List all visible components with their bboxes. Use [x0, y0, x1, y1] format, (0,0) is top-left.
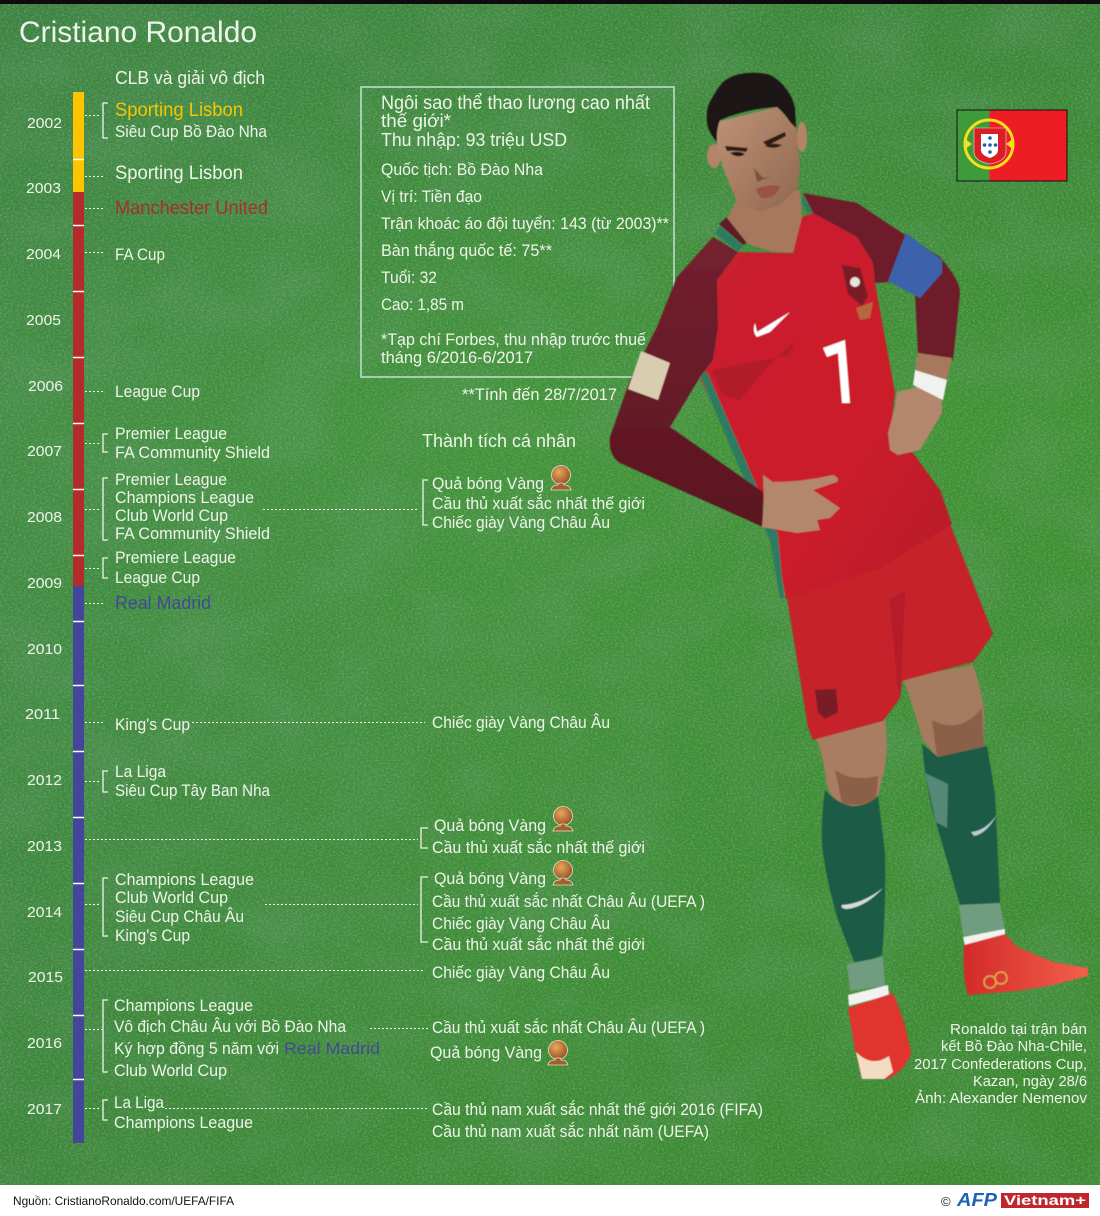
hand on hip	[762, 475, 840, 533]
face	[717, 107, 800, 212]
panel: player facts: thế giới*	[381, 111, 451, 131]
clubs and trophies by year: King's Cup	[115, 927, 190, 945]
panel: player facts: Trận khoác áo đội tuyển: 143 (từ 2003)**	[381, 215, 670, 233]
footnote: **Tính đến 28/7/2017	[462, 386, 617, 404]
individual honours list: Cầu thủ nam xuất sắc nhất thế giới 2016 (FIFA)	[432, 1100, 763, 1119]
clubs and trophies by year: League Cup	[115, 569, 200, 587]
clubs and trophies by year: Club World Cup	[115, 507, 228, 525]
swoosh	[754, 312, 790, 337]
captain armband	[888, 233, 942, 298]
year labels: 2005	[26, 312, 61, 329]
clubs and trophies by year: FA Community Shield	[115, 444, 270, 462]
crest	[842, 265, 873, 320]
year labels: 2011	[25, 706, 60, 723]
icon: golden ball 2014	[553, 860, 573, 885]
individual honours list: Cầu thủ xuất sắc nhất thế giới	[432, 935, 645, 954]
collar	[715, 196, 812, 252]
panel: player facts: Vị trí: Tiền đạo	[381, 188, 482, 206]
year labels: 2013	[27, 838, 62, 855]
year labels: 2007	[27, 443, 62, 460]
clubs and trophies by year: Champions League	[115, 871, 254, 889]
panel: player facts: Ngôi sao thể thao lương cao nhất	[381, 93, 651, 114]
right sleeve	[803, 193, 960, 360]
clubs and trophies by year: La Liga	[114, 1094, 165, 1112]
year labels: 2010	[27, 641, 62, 658]
clubs and trophies by year: Siêu Cup Châu Âu	[115, 907, 244, 926]
panel: player facts: Tuổi: 32	[381, 269, 437, 287]
photo caption: Ảnh: Alexander Nemenov	[915, 1090, 1088, 1107]
clubs and trophies by year: Champions League	[115, 489, 254, 507]
icon: golden ball 2008	[551, 466, 571, 490]
forearm	[915, 353, 952, 380]
connectors and brackets	[85, 103, 430, 1120]
panel: player facts: Thu nhập: 93 triệu USD	[381, 130, 567, 150]
individual honours list: Cầu thủ xuất sắc nhất Châu Âu (UEFA )	[432, 892, 705, 911]
neck	[727, 190, 802, 252]
left sleeve	[610, 237, 763, 527]
individual honours list: Chiếc giày Vàng Châu Âu	[432, 963, 610, 982]
panel: player facts	[361, 87, 674, 377]
shirt shadow	[712, 340, 795, 400]
photo caption: Kazan, ngày 28/6	[973, 1073, 1087, 1090]
sleeve patch	[628, 351, 670, 400]
photo caption	[914, 1021, 1088, 1107]
number 7	[823, 340, 850, 403]
clubs and trophies by year: Premier League	[115, 471, 227, 489]
jersey torso	[700, 213, 952, 599]
source credit: Nguồn: CristianoRonaldo.com/UEFA/FIFA	[13, 1194, 234, 1208]
panel: player facts: Quốc tịch: Bồ Đào Nha	[381, 161, 544, 179]
Vietnam+ logo: Vietnam+	[1004, 1192, 1086, 1208]
clubs and trophies by year: Real Madrid	[115, 593, 211, 613]
year labels: 2002	[27, 115, 62, 132]
shorts	[787, 524, 993, 740]
timeline bar	[73, 92, 84, 1143]
shorts crest	[815, 689, 838, 719]
panel: player facts: Bàn thắng quốc tế: 75**	[381, 241, 553, 260]
individual honours list: Quả bóng Vàng	[434, 817, 546, 835]
heading: clubs and titles: CLB và giải vô địch	[115, 68, 265, 88]
hair	[707, 73, 796, 142]
ears	[707, 122, 807, 168]
individual honours list: Chiếc giày Vàng Châu Âu	[432, 914, 610, 933]
clubs and trophies by year: Sporting Lisbon	[115, 100, 243, 121]
individual honours list: Cầu thủ nam xuất sắc nhất năm (UEFA)	[432, 1122, 709, 1141]
footer band	[0, 1185, 1100, 1216]
clubs and trophies by year: Real Madrid	[284, 1040, 380, 1058]
individual honours list: Quả bóng Vàng	[432, 475, 544, 493]
year labels	[25, 115, 63, 1118]
photo caption: Ronaldo tại trận bán	[950, 1021, 1087, 1038]
clubs and trophies by year	[114, 100, 380, 1132]
individual honours list: Cầu thủ xuất sắc nhất Châu Âu (UEFA )	[432, 1018, 705, 1037]
individual honours list: Cầu thủ xuất sắc nhất thế giới	[432, 494, 645, 513]
clubs and trophies by year: Champions League	[114, 997, 253, 1015]
panel: player facts: *Tạp chí Forbes, thu nhập trước thuế	[381, 331, 646, 349]
hand at waist	[888, 387, 942, 455]
individual honours list: Chiếc giày Vàng Châu Âu	[432, 513, 610, 532]
year labels: 2015	[28, 969, 63, 986]
year labels: 2004	[26, 246, 61, 263]
year labels: 2012	[27, 772, 62, 789]
copyright and AFP logo: ©	[941, 1194, 951, 1209]
heading: individual honours: Thành tích cá nhân	[422, 431, 576, 451]
year labels: 2017	[27, 1101, 62, 1118]
individual honours list: Cầu thủ xuất sắc nhất thế giới	[432, 838, 645, 857]
clubs and trophies by year: Manchester United	[115, 198, 268, 219]
clubs and trophies by year: Siêu Cup Bồ Đào Nha	[115, 123, 268, 141]
clubs and trophies by year: FA Community Shield	[115, 525, 270, 543]
clubs and trophies by year: Ký hợp đồng 5 năm với	[114, 1040, 279, 1058]
clubs and trophies by year: Premier League	[115, 425, 227, 443]
clubs and trophies by year: La Liga	[115, 763, 167, 781]
icon: golden ball 2013	[553, 806, 573, 831]
panel: player facts: Cao: 1,85 m	[381, 296, 464, 314]
individual honours list: Quả bóng Vàng	[430, 1044, 542, 1062]
year labels: 2008	[27, 509, 62, 526]
individual honours list: Quả bóng Vàng	[434, 870, 546, 888]
clubs and trophies by year: FA Cup	[115, 246, 165, 264]
clubs and trophies by year: Club World Cup	[115, 889, 228, 907]
year labels: 2006	[28, 378, 63, 395]
icon: golden ball 2016	[548, 1040, 568, 1065]
individual honours list	[430, 475, 763, 1141]
year labels: 2016	[27, 1035, 62, 1052]
eyes, nose and mouth	[725, 132, 786, 198]
clubs and trophies by year: Champions League	[114, 1114, 253, 1132]
photo caption: 2017 Confederations Cup,	[914, 1056, 1087, 1073]
clubs and trophies by year: Sporting Lisbon	[115, 163, 243, 184]
top black edge	[0, 0, 1100, 4]
panel: player facts: tháng 6/2016-6/2017	[381, 349, 533, 367]
clubs and trophies by year: Vô địch Châu Âu với Bồ Đào Nha	[114, 1017, 347, 1036]
flag of Portugal	[957, 110, 1067, 181]
clubs and trophies by year: Club World Cup	[114, 1062, 227, 1080]
player photo: Cristiano Ronaldo	[610, 73, 1088, 1079]
photo caption: kết Bồ Đào Nha-Chile,	[941, 1038, 1087, 1055]
jersey side stripe	[700, 372, 784, 598]
individual honours list: Chiếc giày Vàng Châu Âu	[432, 713, 610, 732]
copyright and AFP logo: AFP	[956, 1190, 998, 1210]
year labels: 2014	[27, 904, 62, 921]
year labels: 2003	[26, 180, 61, 197]
left leg	[816, 718, 911, 1079]
clubs and trophies by year: Siêu Cup Tây Ban Nha	[115, 782, 271, 800]
clubs and trophies by year: Premiere League	[115, 549, 236, 567]
clubs and trophies by year: King's Cup	[115, 716, 190, 734]
right leg	[903, 665, 1088, 995]
year labels: 2009	[27, 575, 62, 592]
wrist tape	[913, 370, 947, 400]
title: Cristiano Ronaldo	[19, 16, 257, 49]
clubs and trophies by year: League Cup	[115, 383, 200, 401]
copyright and AFP logo	[941, 1190, 998, 1210]
